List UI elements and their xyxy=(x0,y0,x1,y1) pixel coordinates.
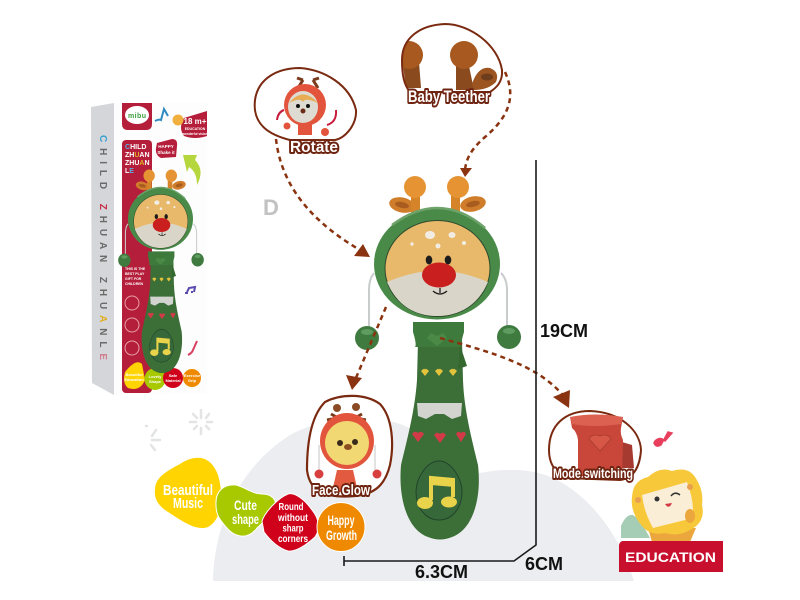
package logo tile xyxy=(122,103,152,130)
toy head xyxy=(374,208,500,320)
dimension label 6.3CM: 6.3CM xyxy=(415,562,468,582)
package red strip: CHILD xyxy=(125,144,146,151)
bubble: round without sharp corners: sharp xyxy=(282,522,304,534)
lion mane xyxy=(632,469,703,534)
glowing mini toy xyxy=(314,403,382,492)
arrow: rotate to head xyxy=(276,139,360,250)
lion body xyxy=(648,528,696,542)
callout: mode switching xyxy=(549,411,641,481)
arrow: collar to mode switching xyxy=(440,338,565,398)
package red strip xyxy=(122,140,152,393)
bubble: round without sharp corners: without xyxy=(277,512,308,524)
bubble: cute shape xyxy=(216,485,275,536)
package box xyxy=(91,103,208,395)
package 18m tile xyxy=(172,111,208,138)
package front panel xyxy=(114,103,207,395)
leaf xyxy=(621,515,650,538)
package red strip: THIS IS THE xyxy=(125,267,146,271)
package logo tile: mibu xyxy=(128,113,146,120)
package 18m tile: 18 m+ xyxy=(184,117,207,126)
label: baby teether: Baby Teether xyxy=(408,87,490,106)
label: mode switching: Mode switching xyxy=(553,465,633,481)
dashed arrows xyxy=(276,72,565,398)
package feature badges: Safe xyxy=(169,373,178,378)
package red strip: CHILDREN xyxy=(125,282,144,286)
sparkles xyxy=(146,410,212,450)
mini toy rotate xyxy=(277,78,336,136)
toy antlers xyxy=(388,176,487,215)
bubble: happy growth: Growth xyxy=(326,528,357,543)
icon: red music note xyxy=(654,432,672,446)
package red strip: LE xyxy=(125,168,134,175)
package red strip: ZHUAN xyxy=(125,160,150,167)
education banner xyxy=(619,541,723,572)
callout: baby teether xyxy=(395,24,502,106)
lion mascot xyxy=(621,469,703,542)
toy handle xyxy=(400,322,479,540)
main toy xyxy=(355,176,521,540)
lion face xyxy=(642,482,693,528)
bubble: beautiful music: Music xyxy=(173,495,203,512)
letter D: D xyxy=(263,195,279,220)
label: rotate: Rotate xyxy=(290,139,338,156)
package feature badges: Shape xyxy=(149,379,162,384)
arrowheads xyxy=(346,168,570,408)
toy side strings and balls xyxy=(355,273,521,350)
package red strip: GIFT FOR xyxy=(125,277,142,281)
package side title: C HILD Z HUAN ZHU A NL E xyxy=(97,135,108,360)
package side panel xyxy=(91,103,114,395)
package happy shake tile: Shake it xyxy=(157,150,175,155)
package feature badges xyxy=(124,362,201,390)
feature bubbles xyxy=(155,458,365,552)
callout: rotate xyxy=(255,68,356,156)
package feature badges: Grip xyxy=(188,378,197,383)
arrow: teether to antler xyxy=(465,72,510,170)
bubble: round without sharp corners xyxy=(262,494,318,551)
dimension label 6CM: 6CM xyxy=(525,554,563,574)
package feature badges: Lovely xyxy=(149,374,162,379)
package 18m tile: EDUCATION xyxy=(185,127,206,131)
callout: face glow xyxy=(307,396,392,499)
bubble: happy growth: Happy xyxy=(328,513,355,528)
package red strip: BEST PLAY xyxy=(125,272,145,276)
package happy shake tile: HAPPY xyxy=(158,144,174,149)
bubble: happy growth xyxy=(317,502,365,552)
bubble: cute shape: Cute xyxy=(234,497,257,513)
bubble: beautiful music xyxy=(155,458,221,528)
dimension label 19CM: 19CM xyxy=(540,321,588,341)
bubble: beautiful music: Beautiful xyxy=(163,482,213,499)
background hill xyxy=(213,419,634,581)
collar part xyxy=(570,414,634,476)
package feature badges: Material xyxy=(165,378,181,383)
package green arrow xyxy=(183,155,201,185)
bubble: cute shape: shape xyxy=(232,511,259,527)
label: face glow: Face Glow xyxy=(312,482,370,499)
education banner: EDUCATION xyxy=(625,549,716,565)
package feature badges: Education xyxy=(124,377,144,382)
package feature badges: Beautiful xyxy=(125,372,143,377)
package feature badges: Exercise xyxy=(184,373,201,378)
bubble: round without sharp corners: corners xyxy=(278,533,308,545)
teether antlers xyxy=(395,41,497,90)
bubble: round without sharp corners: Round xyxy=(278,501,304,513)
dimension lines xyxy=(344,160,536,566)
package toy xyxy=(118,170,204,373)
package 18m tile: wonderful vision xyxy=(181,132,208,136)
package music notes xyxy=(155,109,197,355)
package happy shake tile xyxy=(156,139,177,158)
arrow: head to face glow xyxy=(353,307,386,385)
package red strip: ZHUAN xyxy=(125,152,150,159)
